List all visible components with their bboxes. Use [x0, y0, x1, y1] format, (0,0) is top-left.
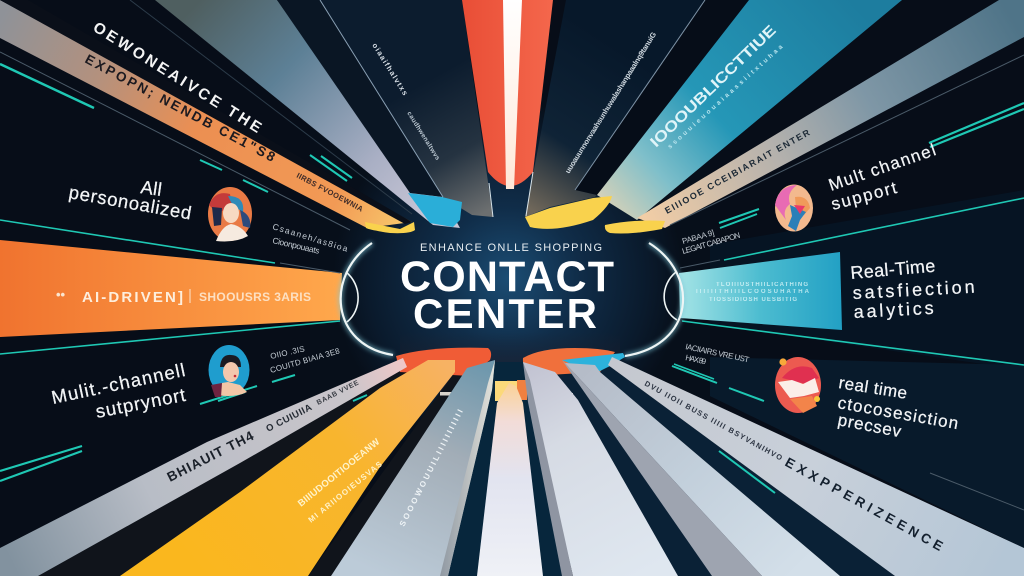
small text: right upper: PABAA 9] [681, 228, 715, 246]
panel: top right grey bar [637, 0, 1024, 228]
label: experience heading: EXXPPERIZEENCE [783, 455, 946, 554]
text: all personalized: All [139, 176, 163, 200]
text line: ctocosesiction [836, 393, 960, 433]
icon: woman orange avatar [208, 187, 252, 241]
small text: right upper [681, 228, 741, 256]
small text: left lower [269, 344, 341, 375]
teal lines: accent strokes [0, 64, 1024, 493]
glow: yellow bar ends [365, 196, 665, 234]
text: real time precsev [836, 373, 960, 441]
text: all personalized [67, 176, 193, 223]
label: grey bar end: BAAB VVEE [316, 380, 360, 407]
text line: aalytics [853, 298, 934, 322]
label: grey bar middle: O CUIUIIA [264, 402, 314, 435]
small text: right lower: IACIIAIRS VRE UST [685, 342, 750, 364]
label: text in right dark panel: uuoauunnonvaahsunhuwalashanpaaalnq9tanuiG [563, 30, 658, 175]
label: second vertical text in dark panel: caudhwenaltwvs [405, 110, 441, 162]
label: experience small text: DVU IIOII BUSS IIIII BSYVANIHVO [643, 379, 784, 462]
subtitle: ENHANCE ONLLE SHOPPING [420, 242, 602, 254]
grey lines: faint strokes [0, 52, 1024, 510]
label: yellow bar text: BIIIUDOOITIOOEANW [296, 437, 382, 509]
title block [400, 242, 614, 337]
text: real-time satisfaction [850, 256, 975, 322]
text line: LEGAIT CABAPON [681, 231, 741, 256]
text line: support [829, 178, 899, 214]
small text: left upper: Csaaneh/as8ioa [271, 221, 349, 254]
label: yellow bar second line: MI ARIIOOIEUSVAS [307, 459, 384, 525]
label: grey bar text: EIIIOOE CCEIBIARAIT ENTER [663, 127, 812, 216]
panel: lower white bar right [523, 362, 678, 576]
panel: experience bar [608, 357, 1024, 576]
text line: HAX 89 [685, 353, 708, 366]
label: blue bar subtext: ssouuieuouaiaassiitxtuhaa [667, 43, 785, 150]
text line: COUITD BIAIA 3E8 [269, 346, 341, 375]
text: real time precsev: real time [837, 373, 908, 403]
label: grey bar heading: BHIAUIT TH4 [165, 428, 256, 485]
text line: Cioonpouaats [272, 235, 321, 256]
panel: lower white bar centre [477, 383, 543, 576]
panel: top right blue bar [597, 0, 902, 220]
shape: orange base caps [396, 348, 625, 376]
thin line: left dark band [130, 0, 412, 214]
label: blue panel second line: IIIIIITHIIILCOOSUHATHA [696, 289, 810, 295]
title: center: CENTER [413, 290, 597, 337]
panel: top left slate bar [155, 0, 493, 228]
text line: satsfiection [852, 277, 975, 303]
label: AI-driven: AI-DRIVEN] [82, 289, 183, 306]
label: white heading on dark band: OEWONEAIVCE THE [90, 19, 264, 137]
panel: real-time blue panel [679, 252, 842, 330]
panel: AI-driven orange bar [0, 240, 342, 337]
label: blue panel third line: TIOSSIDIOSH UESBITIG [709, 297, 797, 303]
panel: lower grey bar centre [331, 360, 495, 576]
panel: lower silver bar right [562, 360, 840, 576]
label: exponent text on orange band: EXPOPN; NENDB CE1"S8 [83, 51, 278, 165]
icon piece: blue block [408, 193, 462, 227]
text line: personoalized [67, 181, 193, 223]
label: blue bar heading: IOOOUBLICCTTIUE [647, 22, 780, 151]
text: real-time satisfaction: Real-Time [850, 256, 936, 283]
icon: woman blue avatar [208, 345, 250, 397]
arc: left bracket [341, 243, 393, 355]
shape: yellow glow behind centre bar [495, 380, 527, 401]
text: multi channel support: Mult channel [826, 140, 938, 195]
label: grey bar centre text: SOOOWOUUILIIIIIIIIIII [398, 408, 465, 528]
text line: precsev [836, 410, 903, 441]
icon: red envelope avatar [775, 357, 821, 413]
title: contact: CONTACT [400, 253, 614, 301]
icon: pink hug avatar [775, 184, 813, 232]
text: multi-channel left: Mulit.-channell [49, 359, 187, 408]
accent: pale dashes [440, 392, 573, 396]
label: vertical text in dark panel: oiaaifhalvtxs [370, 41, 410, 97]
label: shousers: SHOOUSRS 3ARIS [199, 290, 311, 304]
small text: left lower: OIIO .3IS [269, 344, 306, 361]
label: small text on orange band: IIRBS FVOOEWNIA [295, 171, 365, 214]
panel: lower grey bar left [0, 358, 407, 576]
arc: right bracket [625, 243, 683, 356]
label: blue panel lines: TLOIIIUSTHIILICATHING [716, 282, 808, 288]
label: bullets: •• [56, 287, 66, 302]
panel: top right dark panel [525, 0, 749, 217]
panel: lower yellow bar [120, 360, 455, 576]
text line: sutprynort [94, 384, 187, 422]
panel: top left grey-orange bar [0, 0, 412, 228]
panel: top red bar [462, 0, 553, 189]
